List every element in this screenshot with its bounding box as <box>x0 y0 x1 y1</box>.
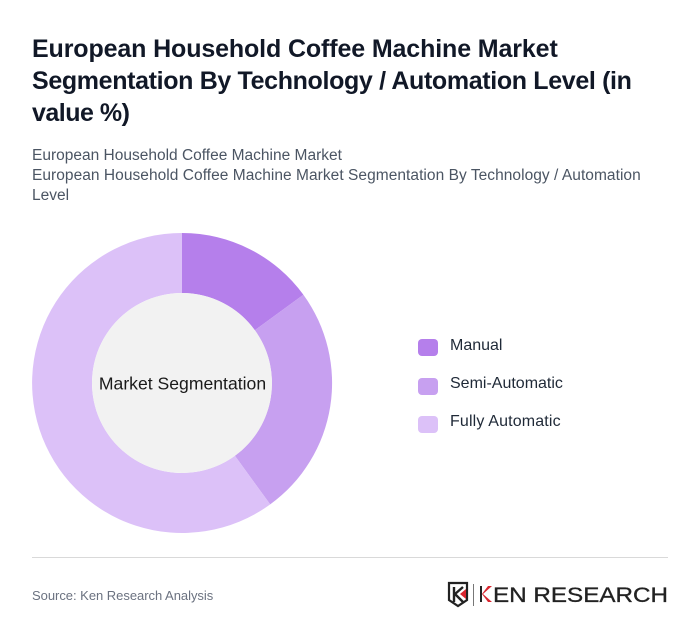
legend: Fully Automatic <box>450 413 561 430</box>
subtitle <box>32 147 641 204</box>
title <box>32 35 632 127</box>
subtitle: European Household Coffee Machine Market <box>32 147 342 164</box>
source note: Source: Ken Research Analysis <box>32 588 213 603</box>
legend <box>418 337 563 433</box>
legend: Semi-Automatic <box>450 375 563 392</box>
legend: Manual <box>450 337 502 354</box>
title: European Household Coffee Machine Market <box>32 35 558 63</box>
donut chart: Market Segmentation <box>99 374 266 394</box>
footer divider <box>32 557 668 558</box>
subtitle: European Household Coffee Machine Market Segmentation By Technology / Automation <box>32 167 641 184</box>
title: value %) <box>32 99 129 127</box>
logo: Ken Research <box>448 582 668 608</box>
logo: Ken Research: EN RESEARCH <box>493 584 668 607</box>
subtitle: Level <box>32 187 69 204</box>
title: Segmentation By Technology / Automation Level (in <box>32 67 632 95</box>
